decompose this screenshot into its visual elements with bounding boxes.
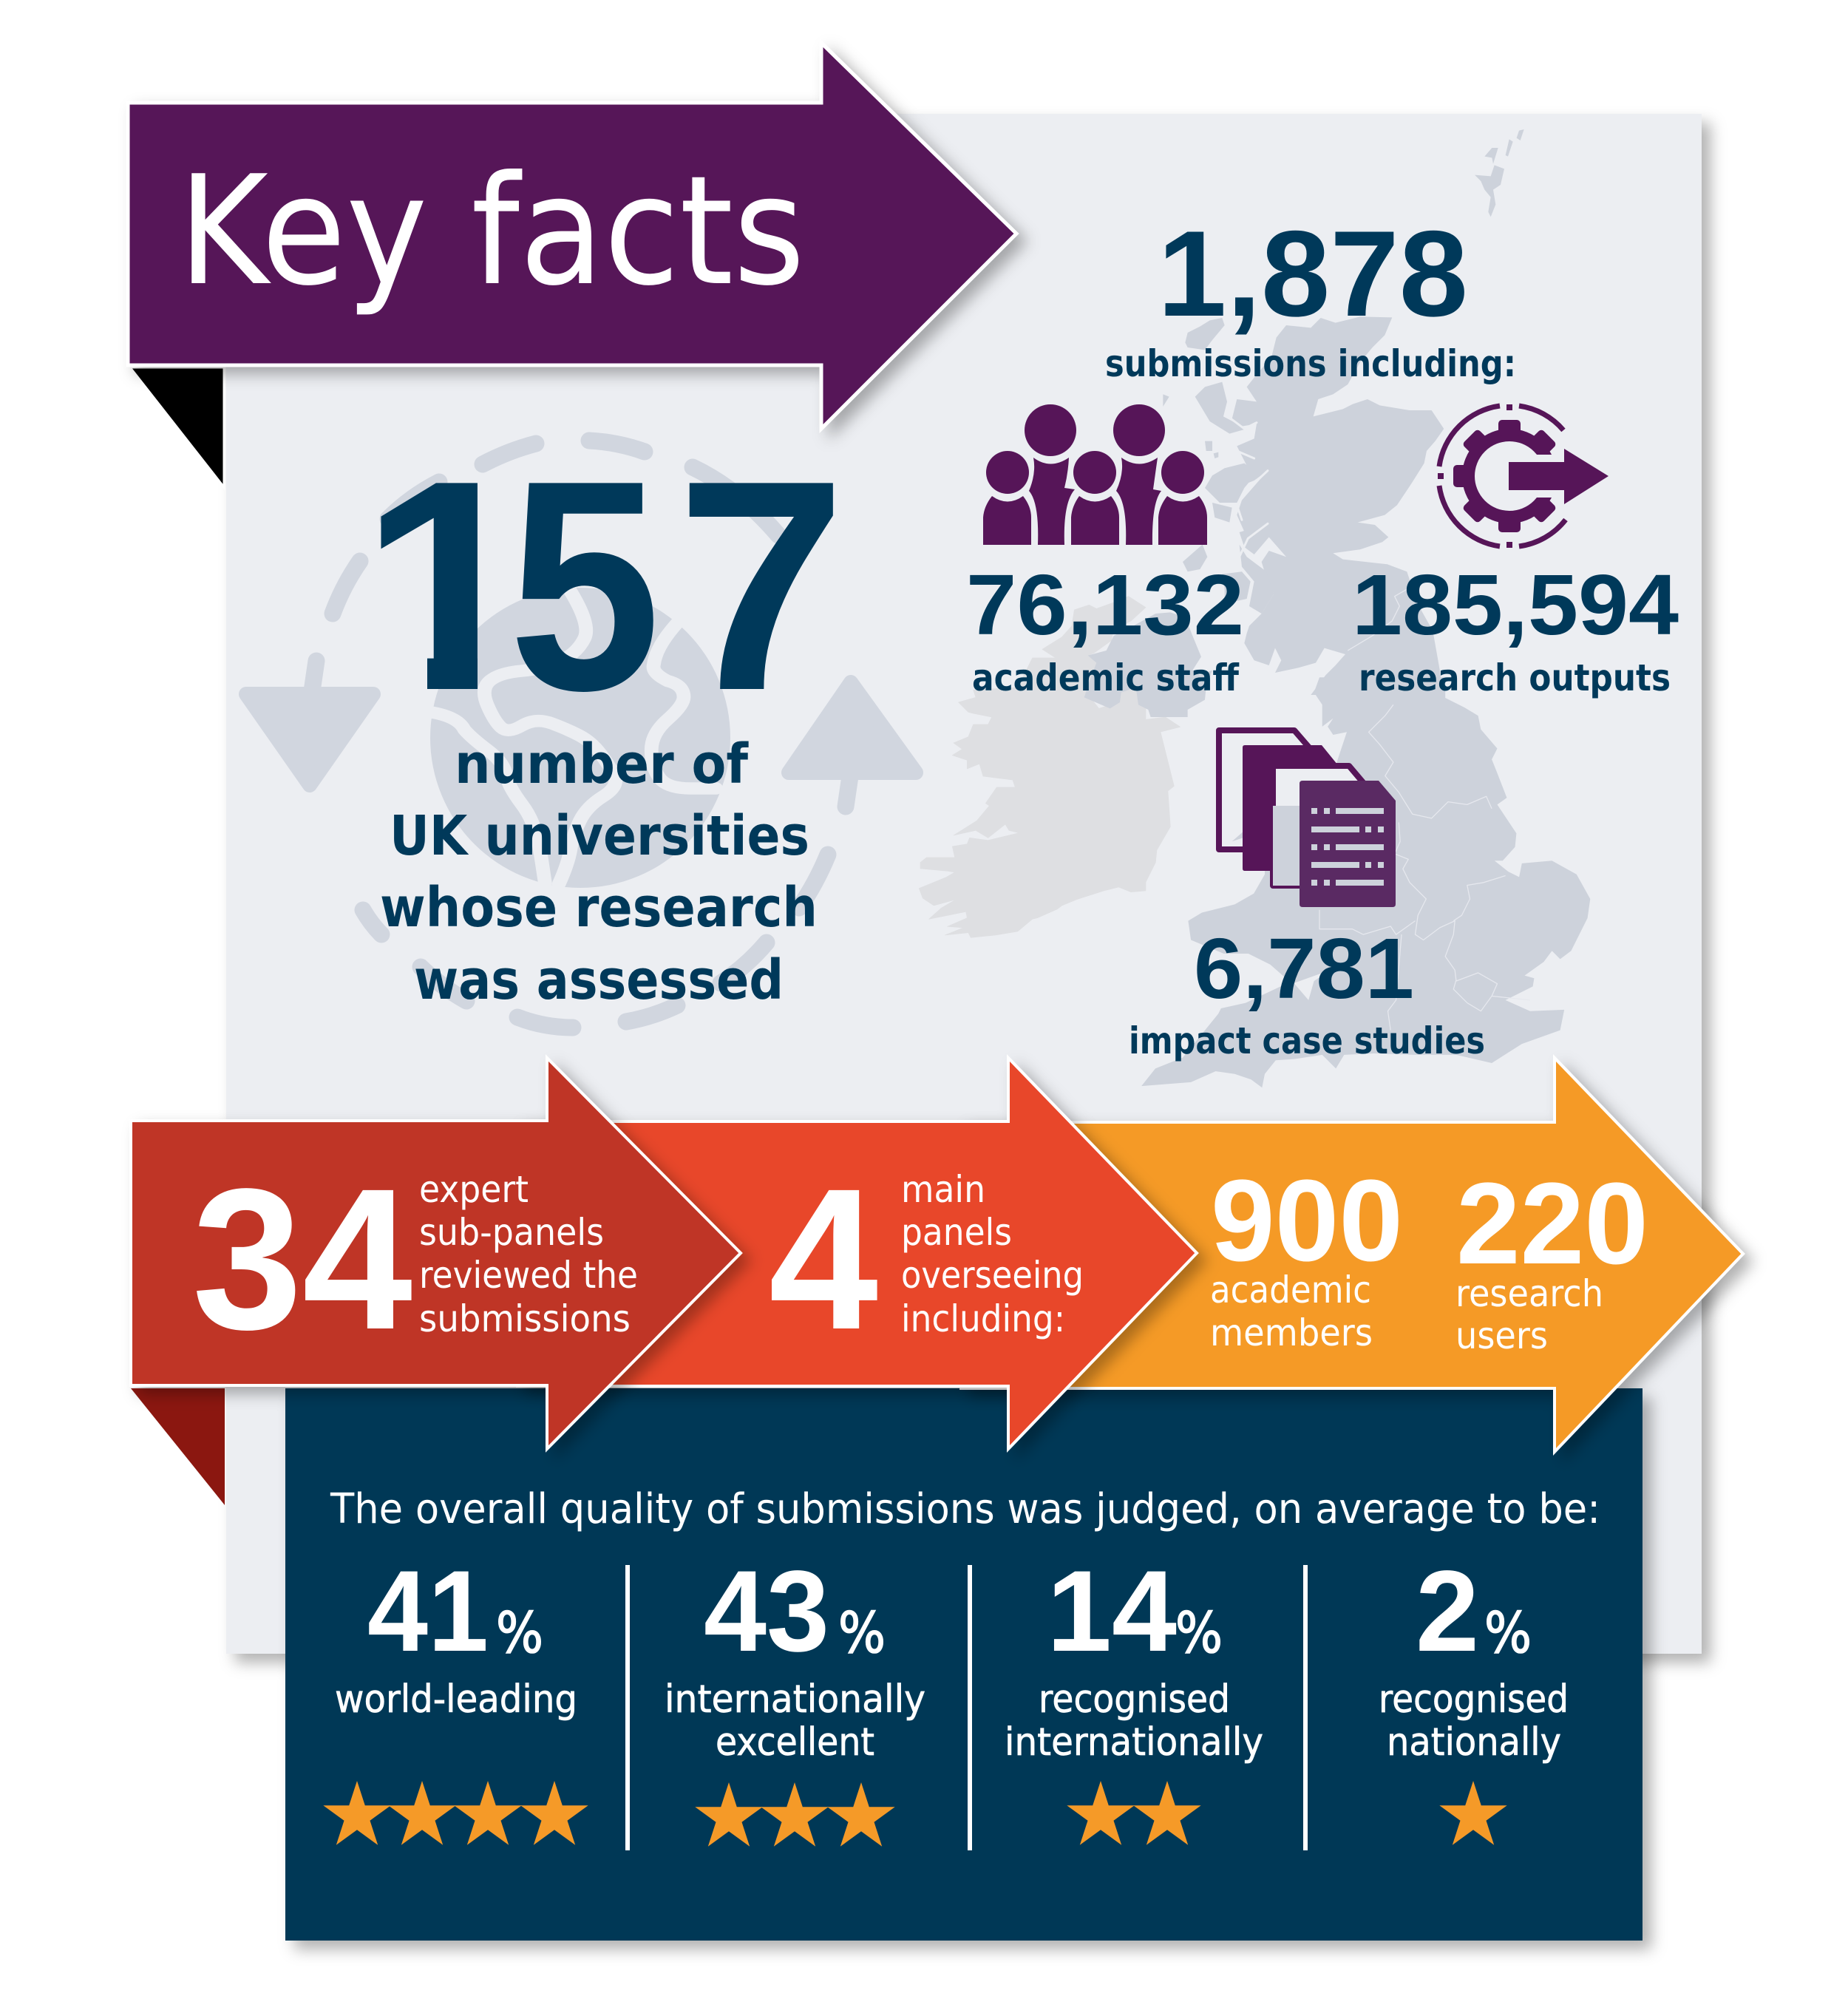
text block: main panels: panels <box>901 1211 1012 1254</box>
stat: 1,878 submissions <box>1105 206 1516 385</box>
column: 2% recognised nationally: recognised <box>1379 1677 1569 1722</box>
column: 41% world-leading <box>323 1547 588 1845</box>
map: Scottish border <box>1348 586 1412 651</box>
map: Anglesey <box>1246 788 1273 812</box>
title: Key facts <box>178 144 805 319</box>
stat: 1,878 submissions: submissions including: <box>1105 342 1516 385</box>
stat: 76,132 academic staff: 76,132 <box>966 557 1244 653</box>
stat: 900 academic members: 900 <box>1211 1156 1403 1286</box>
column: 43% internationally excellent: 43 <box>704 1547 829 1676</box>
stat: 220 research users: research <box>1455 1272 1603 1315</box>
stat: 185,594 research outputs: research outputs <box>1359 656 1671 699</box>
black fold under title arrow <box>130 367 224 487</box>
text block: number of UK universities: UK universities <box>390 804 809 868</box>
icon: dashed ring <box>312 441 850 1028</box>
text block: number of UK universities: whose research <box>380 876 818 940</box>
map: Shetland <box>1475 129 1524 217</box>
map: Scotland <box>1163 316 1444 695</box>
column: 14% recognised internationally: % <box>1175 1600 1223 1666</box>
column: 14% recognised internationally <box>1005 1547 1263 1845</box>
big number 157: 7 <box>676 418 846 753</box>
text block: main panels: including: <box>901 1297 1065 1340</box>
text block: main panels: overseeing <box>901 1254 1084 1297</box>
column: 2% recognised nationally: 2 <box>1416 1547 1479 1676</box>
text block: number of UK universities: was assessed <box>414 948 784 1012</box>
arrow: orange-red <box>517 1058 1197 1449</box>
map: Ireland <box>919 597 1181 937</box>
text block: expert sub-panels: sub-panels <box>419 1211 604 1254</box>
icon: gear with arrow <box>1438 404 1608 548</box>
column: 43% internationally excellent: internationally <box>665 1677 925 1722</box>
icon: globe with recycling arrows <box>246 441 916 1028</box>
icon: gear body <box>1453 420 1557 532</box>
column: 43% internationally excellent: excellent <box>716 1720 874 1765</box>
icon: documents <box>1219 730 1396 907</box>
text block: number of UK universities <box>380 733 818 1012</box>
stat: 76,132 academic staff: academic staff <box>972 656 1239 699</box>
stat: 76,132 academic staff <box>966 557 1244 699</box>
map: England and Wales <box>1141 677 1590 1087</box>
column: 2% recognised nationally: nationally <box>1387 1720 1561 1765</box>
stat: 185,594 research outputs: 185,594 <box>1352 557 1679 653</box>
stat: 900 academic members: academic <box>1210 1269 1371 1311</box>
stars: two <box>1067 1781 1201 1845</box>
dividers <box>625 1565 1308 1850</box>
map: Northern Ireland <box>1084 612 1212 717</box>
stars: three <box>695 1782 895 1847</box>
column: 41% world-leading: % <box>496 1600 543 1666</box>
big number 157 <box>381 483 833 692</box>
number 34: 34 <box>192 1147 414 1371</box>
arrow: red <box>131 1058 741 1449</box>
icon: people <box>983 404 1207 545</box>
stat: 185,594 research outputs <box>1352 557 1679 699</box>
arrow: orange <box>961 1058 1743 1452</box>
column: 2% recognised nationally: % <box>1484 1600 1532 1666</box>
panel: navy quality panel <box>285 1388 1643 1941</box>
icon: gear dashed ring <box>1439 406 1566 546</box>
stat: 220 research users: 220 <box>1456 1159 1648 1289</box>
stars: four <box>323 1781 588 1845</box>
text block: main panels: main <box>901 1168 985 1211</box>
icon: output arrow <box>1509 449 1608 504</box>
stat: 6,781 impact case studies: impact case studies <box>1129 1019 1485 1062</box>
column: 14% recognised internationally: internationally <box>1005 1720 1263 1765</box>
map: regional boundaries <box>1319 705 1530 1031</box>
icon: globe coastlines <box>425 588 716 883</box>
stat: 220 research users: users <box>1455 1314 1548 1357</box>
text block: main panels <box>901 1168 1084 1340</box>
stat: 1,878 submissions: 1,878 <box>1158 206 1468 342</box>
text block: expert sub-panels <box>419 1168 638 1340</box>
column: 14% recognised internationally: 14 <box>1047 1547 1177 1676</box>
title arrow <box>128 43 1016 429</box>
icon: down arrow head <box>246 694 373 785</box>
stat: 6,781 impact case studies: 6,781 <box>1194 920 1414 1016</box>
text block: number of UK universities: number of <box>455 733 749 796</box>
column: 2% recognised nationally <box>1379 1547 1569 1845</box>
big number 157: 1 <box>359 418 537 753</box>
column: 43% internationally excellent: % <box>838 1600 886 1666</box>
map: United Kingdom and Ireland <box>919 129 1590 1087</box>
text block: expert sub-panels: submissions <box>419 1297 631 1340</box>
panel: light background <box>226 114 1702 1654</box>
column: 41% world-leading: world-leading <box>335 1677 577 1722</box>
stars: one <box>1439 1781 1507 1845</box>
column: 41% world-leading: 41 <box>367 1547 489 1676</box>
stat: 900 academic members <box>1210 1156 1403 1354</box>
stat: 220 research users <box>1455 1159 1648 1357</box>
text block: expert sub-panels: expert <box>419 1168 529 1211</box>
stat: 6,781 impact case studies <box>1129 920 1485 1062</box>
icon: up arrow head <box>789 682 916 773</box>
quality heading: The overall quality of submissions was judged, on average to be: <box>330 1485 1600 1533</box>
dark red fold <box>131 1388 225 1505</box>
number 4: 4 <box>769 1147 880 1371</box>
column: 14% recognised internationally: recognised <box>1039 1677 1230 1722</box>
text block: expert sub-panels: reviewed the <box>419 1254 638 1297</box>
big number 157: 5 <box>509 418 661 753</box>
icon: globe disc <box>430 588 730 888</box>
map: sea lochs <box>1222 418 1268 557</box>
column: 43% internationally excellent <box>665 1547 925 1847</box>
stat: 900 academic members: members <box>1210 1311 1373 1354</box>
